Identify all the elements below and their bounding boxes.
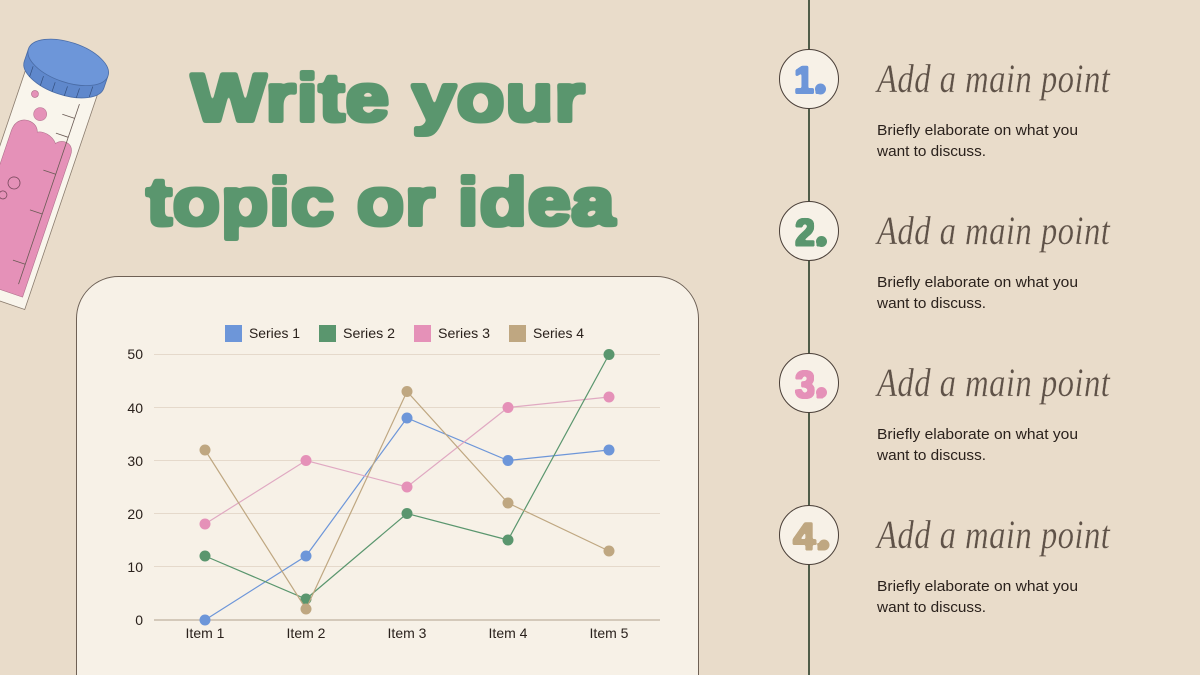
series 3 line [200, 392, 614, 530]
point 4 [780, 506, 1111, 616]
series 4 line [200, 386, 614, 614]
point 3: Briefly elaborate on what you [877, 427, 1078, 443]
point 1 [780, 50, 1111, 160]
panel: chart card [76, 276, 699, 675]
point 4: Briefly elaborate on what you [877, 579, 1078, 595]
point 2: 2. [795, 212, 825, 254]
point 3: Add a main point [875, 360, 1111, 405]
y axis labels: 50 [127, 346, 143, 362]
y axis labels: 40 [127, 400, 143, 416]
x axis labels [186, 625, 629, 641]
point 2: want to discuss. [876, 296, 986, 312]
line chart [127, 325, 660, 641]
x axis labels: Item 1 [186, 625, 225, 641]
x axis labels: Item 3 [388, 625, 427, 641]
chart legend: Series 2 [343, 325, 395, 341]
y axis labels: 20 [127, 506, 143, 522]
title [146, 60, 616, 240]
series 1 line [200, 412, 614, 626]
y axis labels: 10 [127, 559, 143, 575]
point 2: Add a main point [875, 208, 1111, 253]
title: Write your [191, 60, 585, 136]
point 3: want to discuss. [876, 448, 986, 464]
point 4: 4. [793, 516, 827, 558]
point 1: 1. [794, 60, 824, 102]
icon: test tube [0, 30, 114, 311]
y axis labels: 30 [127, 453, 143, 469]
x axis labels: Item 5 [590, 625, 629, 641]
title: topic or idea [146, 164, 616, 240]
chart legend [225, 325, 584, 342]
point 2 [780, 202, 1111, 312]
point 1: Add a main point [875, 56, 1111, 101]
series 2 line [200, 349, 614, 604]
point 1: want to discuss. [876, 144, 986, 160]
chart legend: Series 4 [533, 325, 584, 341]
point 1: Briefly elaborate on what you [877, 123, 1078, 139]
chart legend: Series 3 [438, 325, 490, 341]
y axis labels: 0 [135, 612, 143, 628]
y axis labels [127, 346, 143, 628]
chart legend: Series 1 [249, 325, 300, 341]
point 4: want to discuss. [876, 600, 986, 616]
timeline line [808, 0, 810, 675]
point 2: Briefly elaborate on what you [877, 275, 1078, 291]
x axis labels: Item 2 [287, 625, 326, 641]
point 3 [780, 354, 1111, 464]
point 4: Add a main point [875, 512, 1111, 557]
point 3: 3. [795, 364, 825, 406]
x axis labels: Item 4 [489, 625, 528, 641]
